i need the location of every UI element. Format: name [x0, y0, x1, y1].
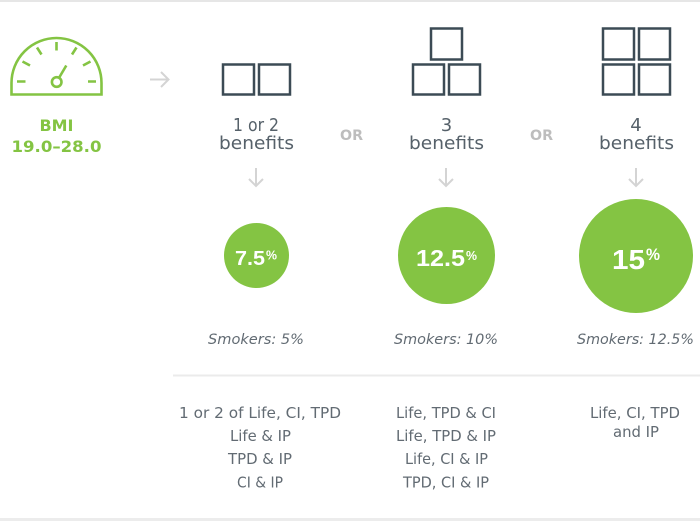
heading: BMI range: 19.0–28.0 [12, 137, 101, 156]
label: 3 benefits [409, 115, 484, 154]
label: 1 or 2 benefits: 1 or 2 [233, 115, 279, 136]
list: benefit combinations [179, 404, 341, 492]
label: 1 or 2 benefits: benefits [219, 133, 294, 154]
list: benefit combinations: Life, TPD & CI [396, 404, 496, 422]
arrow: down [439, 168, 453, 186]
list: benefit combinations: Life, CI, TPD [590, 404, 680, 422]
label: OR: OR [340, 128, 363, 144]
text: smokers 10%: Smokers: 10% [394, 332, 498, 348]
list: benefit combinations: Life, TPD & IP [396, 427, 496, 445]
circle: 12.5%: % [466, 248, 477, 263]
list: benefit combinations: Life, CI & IP [405, 450, 488, 468]
label: 3 benefits: 3 [441, 115, 452, 136]
circle: 12.5%: 12.5 [416, 245, 465, 271]
label: 1 or 2 benefits [219, 115, 294, 154]
list: benefit combinations: and IP [613, 423, 659, 441]
heading: BMI range: BMI [40, 116, 74, 135]
circle: 7.5%: % [266, 248, 277, 262]
circle: 15%: 15 [612, 244, 645, 275]
arrow: BMI to benefits [150, 72, 168, 87]
text: smokers 5%: Smokers: 5% [208, 332, 304, 348]
list: benefit combinations: TPD, CI & IP [402, 474, 489, 492]
label: 4 benefits [599, 115, 674, 154]
label: 4 benefits: 4 [630, 115, 642, 136]
icon: BMI gauge [12, 38, 102, 94]
circle: 15% [579, 199, 693, 313]
label: OR: OR [530, 128, 553, 144]
list: benefit combinations: TPD & IP [227, 450, 292, 468]
panel: 1 or 2 benefits [179, 64, 341, 492]
circle: 7.5% [224, 223, 289, 288]
panel: 3 benefits [394, 28, 498, 492]
text: smokers 12.5%: Smokers: 12.5% [577, 332, 694, 348]
label: 4 benefits: benefits [599, 133, 674, 154]
circle: 15%: % [646, 245, 660, 264]
icon: three boxes [413, 28, 480, 94]
list: benefit combinations [590, 404, 680, 441]
icon: two boxes [223, 64, 290, 94]
heading: BMI range [12, 116, 101, 156]
panel: 4 benefits [577, 28, 694, 441]
list: benefit combinations: CI & IP [237, 474, 283, 492]
list: benefit combinations: 1 or 2 of Life, CI, TPD [179, 404, 341, 422]
icon: four boxes [603, 28, 670, 94]
arrow: down [629, 168, 643, 186]
label: 3 benefits: benefits [409, 133, 484, 154]
arrow: down [249, 168, 263, 186]
circle: 12.5% [398, 207, 495, 304]
list: benefit combinations: Life & IP [230, 427, 291, 445]
list: benefit combinations [396, 404, 496, 492]
circle: 7.5%: 7.5 [235, 248, 265, 270]
